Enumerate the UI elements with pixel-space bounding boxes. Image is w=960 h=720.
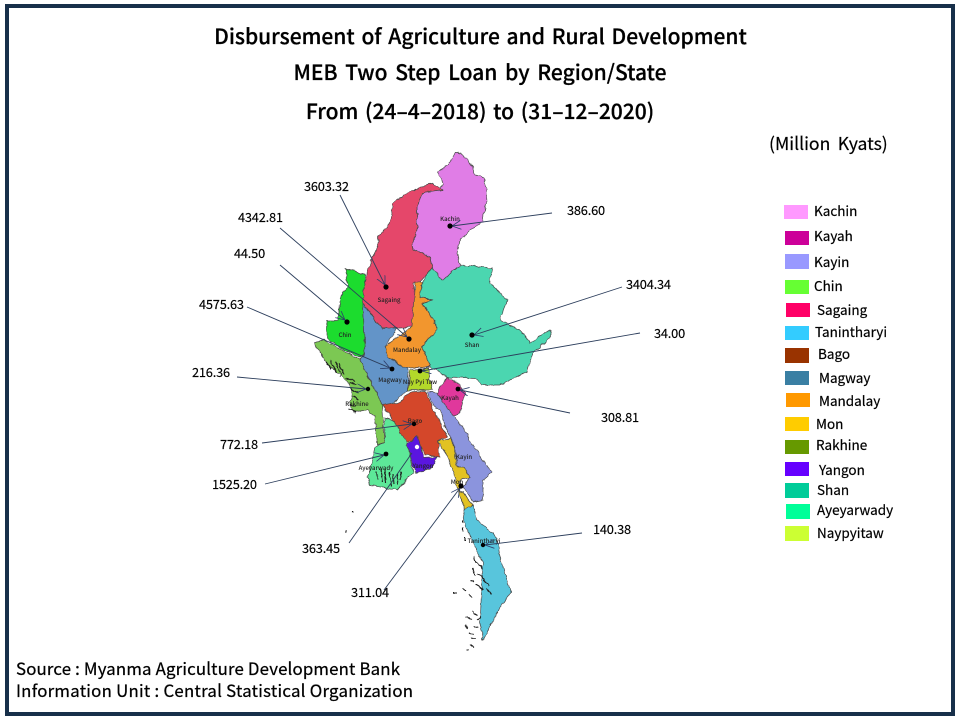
- value labels: 363.45: [302, 538, 340, 557]
- legend: Sagaing: [786, 299, 868, 319]
- region: Bago: [382, 391, 447, 457]
- map place names: Rakhine: [345, 399, 369, 408]
- map place names: Shan: [465, 340, 480, 349]
- legend: Kayin: [785, 251, 849, 271]
- region: Mon: [438, 438, 473, 510]
- legend: Bago: [785, 343, 850, 363]
- value labels: 311.04: [351, 582, 389, 601]
- map place names: Magway: [378, 375, 402, 384]
- legend: Rakhine: Rakhine: [816, 434, 867, 454]
- value labels: 216.36: [192, 362, 230, 381]
- map place names: Chin: [338, 330, 352, 339]
- region: Mandalay: [385, 282, 438, 368]
- legend: Yangon: [785, 459, 865, 479]
- legend: [784, 200, 893, 542]
- title: [214, 21, 747, 126]
- legend: Shan: Shan: [817, 479, 849, 499]
- legend: Chin: Chin: [814, 275, 843, 295]
- map place names: Yangon: [412, 461, 434, 470]
- title: Disbursement of Agriculture and Rural Development: [214, 21, 747, 51]
- map place names: Nay Pyi Taw: [403, 377, 437, 386]
- legend: Sagaing: Sagaing: [817, 299, 868, 319]
- value labels: 44.50: [234, 243, 265, 262]
- region: Magway: [360, 303, 408, 405]
- source note: [16, 656, 413, 702]
- region: Yangon: [407, 436, 437, 473]
- value labels: 3603.32: [304, 176, 349, 195]
- map place names: Sagaing: [378, 295, 401, 304]
- region: Ayeyarwady: [368, 418, 413, 490]
- map place names: Bago: [408, 416, 423, 425]
- legend: Shan: [785, 479, 849, 499]
- region: Chin: [327, 268, 365, 358]
- region: Shan: [420, 265, 550, 385]
- legend: Chin: [785, 275, 843, 295]
- value labels: 386.60: [567, 200, 605, 219]
- region: Kayah: [438, 377, 465, 416]
- value labels: 34.00: [654, 323, 685, 342]
- legend: Ayeyarwady: Ayeyarwady: [817, 499, 893, 519]
- coastal islands: [326, 360, 491, 650]
- value labels: 140.38: [593, 519, 631, 538]
- region: Kayin: [427, 392, 492, 502]
- legend: Mon: Mon: [816, 413, 843, 433]
- region: Tanintharyi: [463, 505, 511, 640]
- leader lines: [237, 195, 640, 590]
- map place names: [338, 214, 501, 545]
- value labels: [192, 176, 685, 601]
- legend: Mandalay: [786, 390, 880, 410]
- legend: Mon: [785, 413, 843, 433]
- title: MEB Two Step Loan by Region/State: [293, 57, 667, 87]
- value labels: 4575.63: [199, 294, 244, 313]
- value labels: 3404.34: [626, 274, 671, 293]
- source note: Information Unit : Central Statistical Organization: [16, 678, 413, 702]
- map of Myanmar: [315, 152, 550, 640]
- map place names: Kayah: [441, 393, 459, 402]
- legend: Kayah: Kayah: [814, 225, 853, 245]
- legend: Naypyitaw: [785, 522, 884, 542]
- map place names: Kayin: [456, 452, 472, 461]
- map place names: Mon: [451, 477, 463, 486]
- region: Sagaing: [362, 183, 443, 328]
- value labels: 4342.81: [238, 207, 283, 226]
- legend: Kachin: [784, 200, 857, 220]
- map place names: Ayeyarwady: [359, 463, 394, 472]
- value labels: 1525.20: [212, 474, 257, 493]
- region: Rakhine: [315, 340, 385, 445]
- map place names: Kachin: [440, 214, 460, 223]
- legend: Kayah: [785, 225, 853, 245]
- legend: Mandalay: Mandalay: [819, 390, 880, 410]
- legend: Magway: [785, 367, 870, 387]
- legend: Bago: Bago: [818, 343, 850, 363]
- legend: Naypyitaw: Naypyitaw: [817, 522, 884, 542]
- location dots: [344, 223, 485, 547]
- map place names: Mandalay: [393, 345, 422, 354]
- legend: Rakhine: [785, 434, 867, 454]
- legend: Kayin: Kayin: [814, 251, 849, 271]
- value labels: 772.18: [220, 434, 258, 453]
- map place names: Tanintharyi: [468, 536, 501, 545]
- legend: Kachin: Kachin: [814, 200, 857, 220]
- title: From (24–4–2018) to (31–12–2020): [306, 96, 654, 126]
- legend: Magway: Magway: [819, 367, 870, 387]
- value labels: 308.81: [601, 407, 639, 426]
- region: Kachin: [412, 152, 487, 280]
- unit note: (Million Kyats): [769, 131, 888, 156]
- legend: Tanintharyi: Tanintharyi: [815, 321, 887, 341]
- region: Naypyitaw: [408, 368, 432, 390]
- legend: Yangon: Yangon: [818, 459, 865, 479]
- source note: Source : Myanma Agriculture Development Bank: [16, 656, 401, 680]
